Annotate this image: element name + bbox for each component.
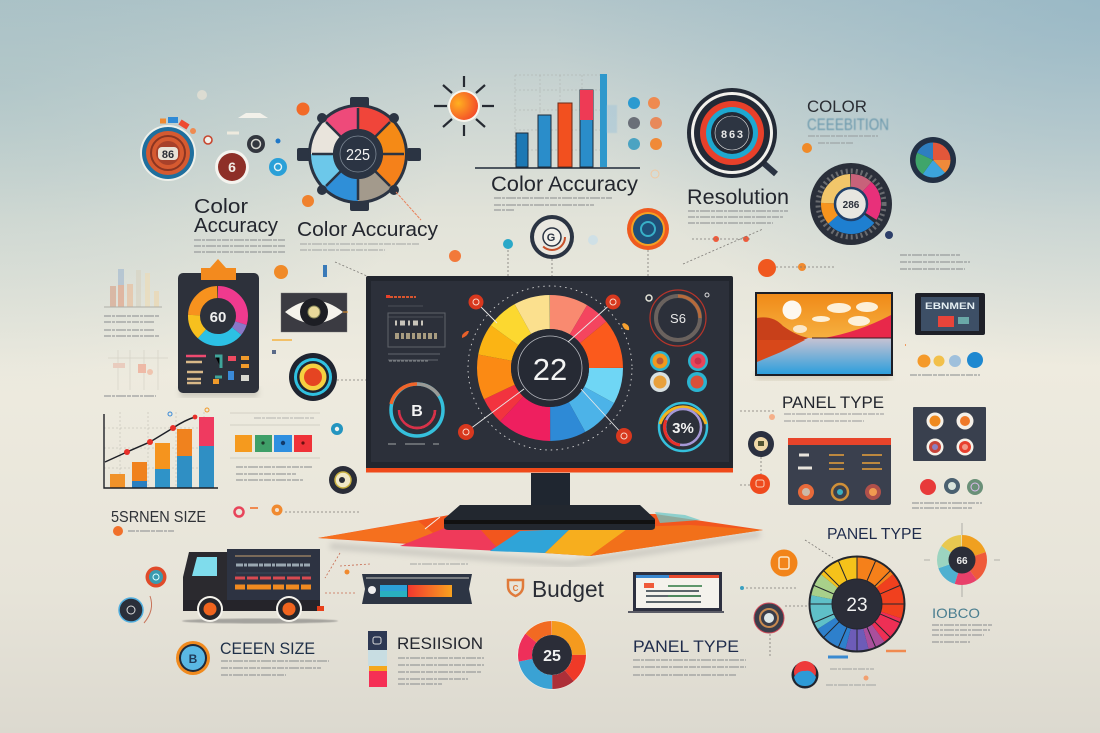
monitor callouts (458, 294, 632, 444)
heading: Color Accuracy centre: Color Accuracy (491, 172, 638, 196)
icons: truck side badges (119, 566, 166, 623)
heading: resolution bottom: RESIISION (397, 634, 483, 653)
heading: Color Accuracy stacked (194, 196, 278, 237)
legend dots: bar chart (628, 97, 662, 178)
wheel chart: right top (810, 163, 893, 245)
gauge value: 86 (162, 149, 174, 161)
gauge: top left (140, 120, 196, 181)
card: four dots (913, 407, 986, 461)
heading: Color Celebration (807, 97, 889, 134)
wheel chart: bottom right (808, 556, 906, 652)
card: color donut (178, 259, 259, 397)
icon: eye (281, 293, 348, 332)
badge letter: G (547, 232, 555, 244)
heading: panel type right: PANEL TYPE (827, 526, 922, 543)
monitor dots (650, 351, 708, 392)
donut value: 60 (210, 309, 226, 326)
text block: screen size (221, 661, 329, 675)
connector: panel left (740, 411, 776, 420)
wheel value: 225 (346, 147, 370, 164)
bar chart: top centre (475, 74, 640, 168)
text block: panel type bottom (633, 660, 746, 675)
text block: lower right (912, 503, 982, 508)
text block: panel type (784, 414, 884, 421)
monitor gauge: 3% (659, 403, 707, 451)
ribbon panel (362, 574, 472, 604)
gauge letter: B (411, 403, 423, 420)
swatch column (368, 631, 387, 687)
heading: Color Accuracy stacked: Accuracy (194, 215, 278, 237)
faded chart: left middle (108, 350, 168, 390)
icon: shield (508, 580, 523, 596)
gauge: resolution (687, 88, 777, 178)
icon: sun (434, 76, 494, 136)
monitor left header (386, 295, 445, 361)
gauge value: 3% (672, 420, 694, 437)
line and bar chart (104, 408, 218, 488)
text block: left notes (104, 316, 160, 396)
badges: above monitor (274, 208, 836, 279)
badge letter: B (189, 652, 198, 666)
landscape picture (755, 292, 893, 380)
monitor gauge: B (388, 384, 443, 444)
icon: small orange and ring badges (740, 540, 833, 688)
badges row: lower right (920, 478, 983, 495)
text block: ribbon caption (410, 563, 468, 565)
donut: budget (518, 620, 586, 690)
text block: under centre heading (494, 198, 612, 210)
text blocks: right column (910, 374, 980, 376)
tablet: screen label (915, 293, 985, 335)
small wheel: right (924, 523, 1000, 597)
heading: screen size left: 5SRNEN SIZE (111, 509, 206, 526)
icon: laptop (628, 572, 724, 612)
color swatches chart (230, 413, 320, 458)
heading: Color Accuracy stacked: Color (194, 196, 248, 218)
heading: IOCCO: IOBCO (932, 605, 980, 621)
icon: shield: C (513, 584, 519, 593)
text block: under heading (300, 244, 420, 250)
monitor main wheel (468, 286, 632, 450)
heading: panel type bottom: PANEL TYPE (633, 637, 739, 656)
swatch dots row (905, 345, 983, 368)
icons: dots left of monitor (234, 423, 360, 516)
desk mat (318, 512, 763, 564)
text block: top right note (900, 255, 970, 269)
wheel value: 286 (843, 200, 860, 211)
pie icon: top right (910, 137, 956, 183)
monitor gauge: top right (646, 290, 709, 346)
text block: resolution (688, 211, 788, 223)
heading: panel type: PANEL TYPE (782, 394, 884, 412)
icon: truck (182, 549, 338, 624)
wheel value: 22 (533, 352, 567, 387)
text block: under stacked heading (194, 240, 286, 252)
wheel chart: top left (297, 97, 421, 220)
faded bar chart: left (104, 269, 162, 307)
tablet label text: EBNMEN (925, 301, 975, 312)
wheel value: 23 (846, 595, 868, 616)
heading: Color Celebration: CEEEBITION (807, 115, 889, 134)
icon cluster: small badges (197, 90, 314, 207)
heading: Color Celebration: COLOR (807, 97, 867, 116)
note: under screen size (113, 526, 174, 536)
heading: Color Accuracy: Color Accuracy (297, 218, 439, 241)
text block: resolution bottom (398, 658, 484, 684)
badge value: 6 (228, 159, 236, 175)
card: dashboard (788, 438, 891, 505)
text block: color celebration (808, 136, 878, 143)
heading: Resolution: Resolution (687, 184, 789, 209)
monitor (366, 276, 733, 472)
gauge value: S6 (670, 311, 686, 326)
text block: swatches (236, 467, 312, 480)
icon: budget blue badge (176, 641, 210, 675)
donut value: 25 (543, 648, 561, 665)
note: eye caption (272, 340, 292, 354)
heading: screen size bottom: CEEEN SIZE (220, 640, 315, 658)
icon: orange dot (802, 143, 812, 153)
text block: bottom callouts (826, 651, 906, 685)
wheel value: 66 (956, 556, 968, 567)
text block: IOCCO (932, 625, 992, 642)
connector: truck to ribbon (325, 553, 370, 593)
heading: budget: Budget (532, 576, 605, 602)
gauge value: 863 (721, 129, 743, 141)
monitor stand (444, 473, 655, 530)
icon: target (289, 353, 367, 401)
icons: panel side dots (740, 431, 774, 494)
